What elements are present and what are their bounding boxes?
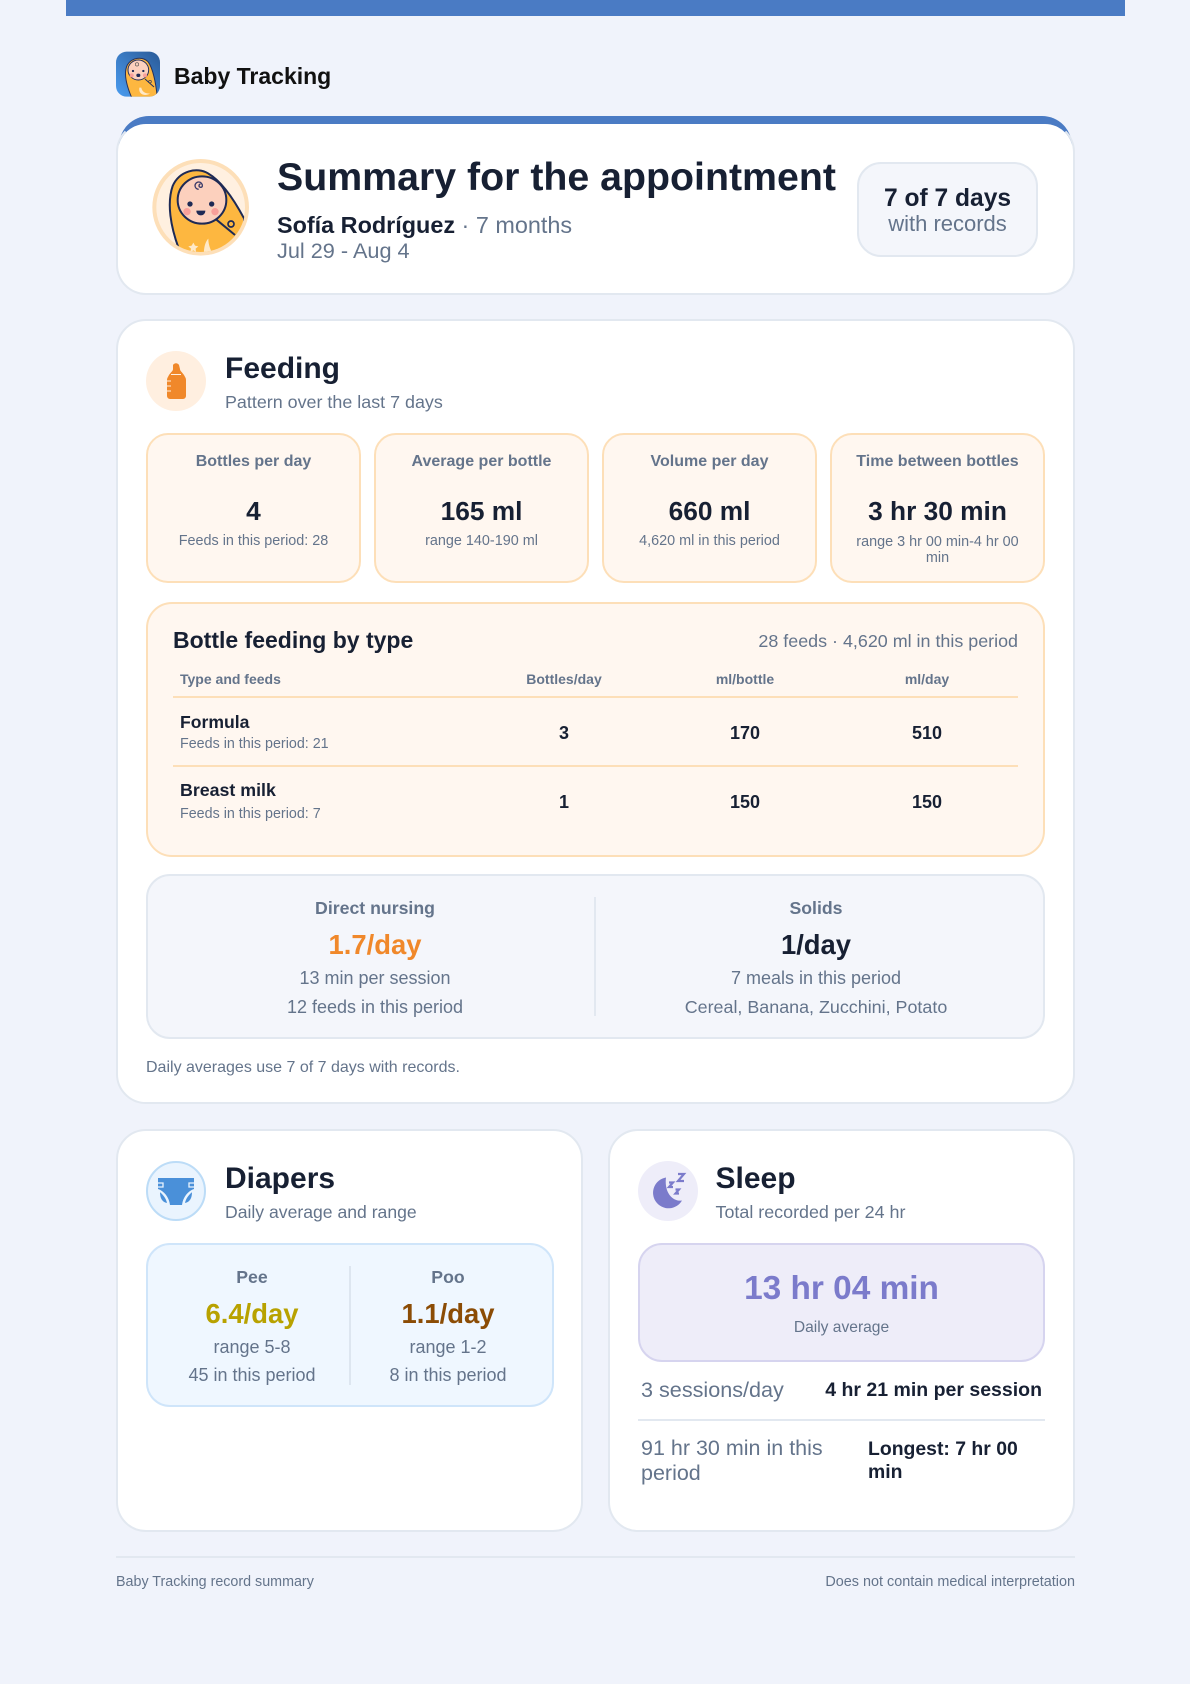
row: formula: 170 — [730, 723, 760, 743]
records badge — [857, 162, 1038, 257]
row: formula: 510 — [912, 723, 942, 743]
row: breast milk — [180, 780, 942, 822]
panel: sleep average: 13 hr 04 min — [744, 1270, 939, 1307]
longest sleep — [868, 1438, 1018, 1483]
footer left: Baby Tracking record summary — [116, 1574, 314, 1590]
pee column: 6.4/day — [206, 1298, 298, 1328]
date range: Jul 29 - Aug 4 — [277, 238, 410, 263]
stat: average per bottle: range 140-190 ml — [425, 533, 538, 549]
panel: summary — [116, 122, 1075, 295]
icon: diaper — [146, 1161, 206, 1221]
longest sleep: min — [868, 1461, 902, 1483]
row: breast milk: 150 — [730, 792, 760, 812]
stat: bottles per day: Feeds in this period: 28 — [179, 533, 328, 549]
stat: volume per day — [602, 433, 817, 583]
table header: Bottles/day — [526, 671, 602, 687]
top bar — [66, 0, 1125, 16]
row: breast milk: 150 — [912, 792, 942, 812]
brand name: Baby Tracking — [174, 62, 331, 88]
table totals: 28 feeds · 4,620 ml in this period — [758, 631, 1018, 651]
solids column: 1/day — [781, 928, 851, 960]
solids column: Cereal, Banana, Zucchini, Potato — [685, 996, 947, 1016]
direct nursing column: 13 min per session — [299, 968, 451, 988]
panel: diaper stats — [146, 1243, 554, 1407]
per session: 4 hr 21 min per session — [825, 1379, 1042, 1401]
icon: app logo — [116, 52, 160, 97]
solids column: 7 meals in this period — [731, 968, 901, 988]
sleep heading: Sleep — [716, 1162, 796, 1195]
icon: moon — [638, 1161, 698, 1221]
poo column: Poo — [431, 1267, 465, 1287]
panel: diapers — [116, 1129, 583, 1532]
stat: time between bottles: 3 hr 30 min — [868, 496, 1007, 526]
daily averages note: Daily averages use 7 of 7 days with records. — [146, 1059, 460, 1076]
stat: volume per day: Volume per day — [651, 453, 768, 470]
poo column: range 1-2 — [409, 1337, 487, 1357]
diapers subheading: Daily average and range — [225, 1202, 417, 1222]
stat: volume per day: 660 ml — [669, 496, 750, 526]
direct nursing column: Direct nursing — [315, 898, 435, 918]
records badge: with records — [888, 211, 1007, 236]
table header: Type and feeds — [180, 671, 281, 687]
solids column — [685, 898, 947, 1016]
sessions per day: 3 sessions/day — [641, 1377, 784, 1402]
stat: time between bottles: Time between bottles — [856, 453, 1019, 470]
panel: feeding — [116, 319, 1075, 1104]
panel: sleep — [608, 1129, 1075, 1532]
stat: time between bottles — [830, 433, 1045, 583]
panel: bottle feeding by type — [146, 602, 1045, 857]
direct nursing column: 12 feeds in this period — [287, 997, 463, 1017]
summary title: Summary for the appointment — [277, 154, 836, 198]
panel: nursing and solids — [146, 874, 1045, 1039]
poo column: 8 in this period — [389, 1365, 507, 1385]
row: formula: Feeds in this period: 21 — [180, 736, 329, 752]
row: breast milk: Feeds in this period: 7 — [180, 806, 321, 822]
row: formula: Formula — [180, 712, 249, 732]
stat: volume per day: 4,620 ml in this period — [639, 533, 780, 549]
panel: sleep average — [638, 1243, 1045, 1362]
sleep total in period: 91 hr 30 min in this — [641, 1436, 823, 1460]
sleep subheading: Total recorded per 24 hr — [716, 1202, 905, 1222]
records badge: 7 of 7 days — [884, 185, 1011, 212]
row: formula — [180, 712, 942, 752]
pee column — [188, 1267, 316, 1385]
brand header — [116, 52, 331, 97]
panel: sleep average: Daily average — [794, 1319, 889, 1336]
table title: Bottle feeding by type — [173, 626, 413, 652]
pee column: 45 in this period — [188, 1365, 316, 1385]
pee column: range 5-8 — [213, 1337, 291, 1357]
solids column: Solids — [789, 898, 843, 918]
stat: bottles per day: 4 — [246, 496, 261, 526]
poo column — [389, 1267, 507, 1385]
table header: ml/day — [905, 671, 949, 687]
stat: average per bottle: Average per bottle — [412, 453, 551, 470]
table header: ml/bottle — [716, 671, 774, 687]
pee column: Pee — [236, 1267, 268, 1287]
sleep total in period — [641, 1436, 823, 1485]
poo column: 1.1/day — [402, 1298, 494, 1328]
stat: bottles per day: Bottles per day — [196, 453, 311, 470]
blue top accent of summary card — [119, 116, 1072, 156]
longest sleep: Longest: 7 hr 00 — [868, 1438, 1018, 1460]
row: breast milk: 1 — [559, 792, 569, 812]
sleep total in period: period — [641, 1461, 701, 1485]
stat: bottles per day — [146, 433, 361, 583]
diapers heading: Diapers — [225, 1162, 335, 1195]
direct nursing column — [287, 898, 463, 1017]
row: formula: 3 — [559, 723, 569, 743]
stat: time between bottles: range 3 hr 00 min-4 hr 00 min — [856, 534, 1019, 566]
patient name and age: Sofía Rodríguez · 7 months — [277, 212, 572, 238]
stat: average per bottle — [374, 433, 589, 583]
direct nursing column: 1.7/day — [329, 928, 421, 960]
feeding subheading: Pattern over the last 7 days — [225, 392, 443, 412]
feeding heading: Feeding — [225, 352, 340, 385]
footer right: Does not contain medical interpretation — [825, 1574, 1075, 1590]
icon: baby avatar — [152, 159, 249, 256]
table header — [180, 671, 949, 687]
icon: bottle — [146, 351, 206, 411]
stat: average per bottle: 165 ml — [441, 496, 522, 526]
row: breast milk: Breast milk — [180, 780, 276, 800]
